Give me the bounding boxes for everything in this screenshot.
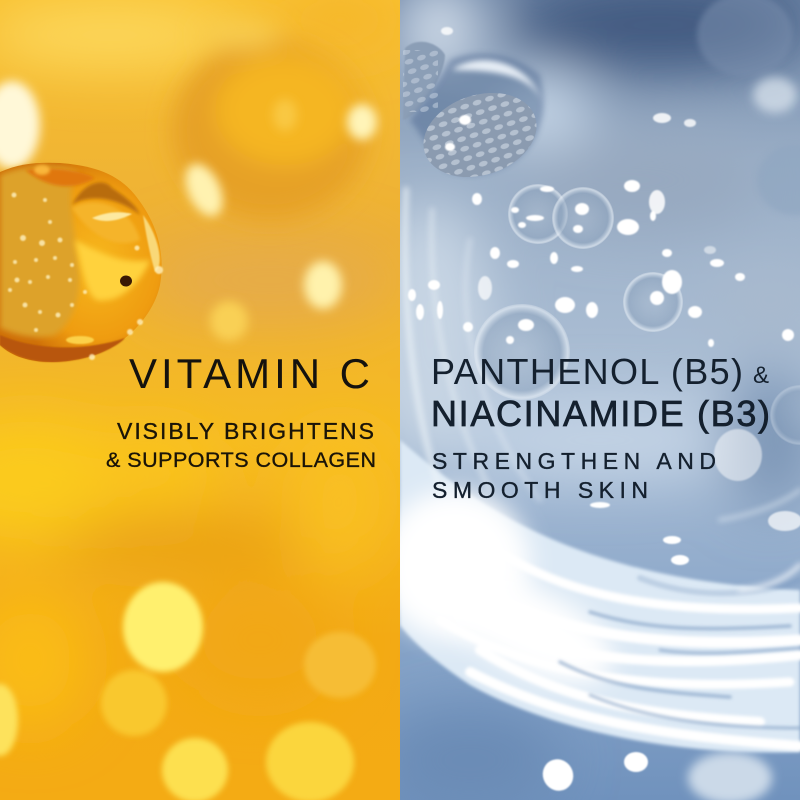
heading: panthenol and niacinamide: & xyxy=(753,362,769,389)
soft golden glows xyxy=(0,0,400,730)
heading: panthenol and niacinamide: PANTHENOL (B5) xyxy=(431,351,743,392)
bubbles xyxy=(403,42,800,445)
bokeh lights xyxy=(0,81,377,341)
sparkle highlights xyxy=(408,27,800,796)
blurred background droplet xyxy=(172,21,368,220)
text block: vitamin C benefit: VISIBLY BRIGHTENS xyxy=(117,418,374,444)
icon: golden vitamin C droplet xyxy=(0,163,163,362)
panel: vitamin C golden background xyxy=(0,0,400,800)
text block: vitamin C benefit: & SUPPORTS COLLAGEN xyxy=(106,448,376,472)
text block: panthenol and niacinamide benefit xyxy=(432,448,716,503)
heading: vitamin C: VITAMIN C xyxy=(129,350,370,397)
heading: panthenol and niacinamide: NIACINAMIDE (B3) xyxy=(431,393,770,434)
text block: panthenol and niacinamide benefit: STRENGTHEN AND xyxy=(432,448,716,474)
heading: panthenol and niacinamide xyxy=(431,351,770,434)
panel: panthenol and niacinamide blue background xyxy=(370,0,800,800)
swirling water ripples xyxy=(380,190,800,752)
text block: vitamin C benefit xyxy=(106,418,376,472)
tonal light and shadow xyxy=(370,0,800,800)
text block: panthenol and niacinamide benefit: SMOOTH SKIN xyxy=(432,477,648,503)
upper ripple streaks xyxy=(405,190,800,590)
